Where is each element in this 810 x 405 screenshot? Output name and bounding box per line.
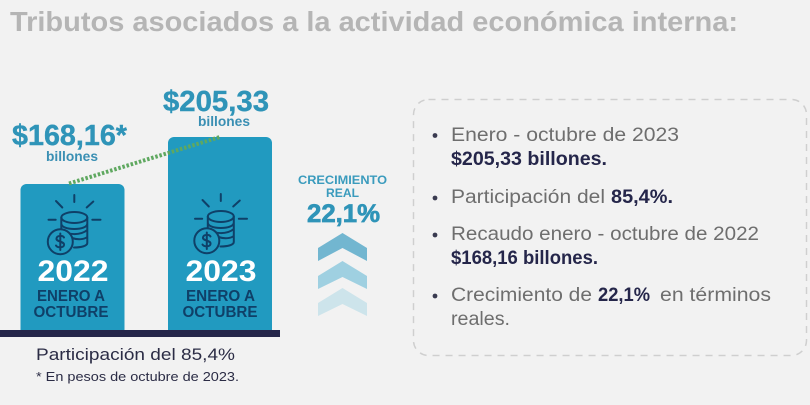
baseline [0,330,280,337]
real growth callout: 22,1% [307,200,380,228]
value: 2023: $205,33 [163,86,269,118]
chart note: participation: Participación del 85,4% [36,345,235,364]
bullet: crecimiento: en términos [660,285,771,306]
bar: 2023 [168,137,272,330]
bullet: recaudo 2022: Recaudo enero - octubre de 2022 [451,224,759,245]
bullet: enero octubre 2023: $205,33 billones. [451,149,607,170]
bullet: recaudo 2022: $168,16 billones. [451,248,598,269]
title: Tributos asociados a la actividad económica interna: [10,6,738,37]
bullet: participacion: Participación del [451,187,605,208]
bullet: crecimiento: reales. [451,309,510,330]
panel: summary [414,100,806,356]
bullet: crecimiento: 22,1% [598,285,650,306]
value: 2022: billones [46,149,98,164]
value: 2022: $168,16* [12,120,128,152]
bar: 2023: 2023 [186,255,256,288]
bullet: enero octubre 2023 [433,125,679,170]
real growth callout: REAL [326,186,359,200]
bullet: enero octubre 2023: Enero - octubre de 2023 [451,125,679,146]
bar: 2022 [20,184,124,330]
bullet: crecimiento: Crecimiento de [451,285,592,306]
real growth callout [298,173,387,316]
bullet: crecimiento [433,285,771,330]
bar: 2023: ENERO A [186,288,255,305]
bullet: participacion: 85,4%. [611,187,673,208]
bullet: participacion [433,187,673,208]
bar chart [0,86,280,337]
value: 2023: billones [198,114,250,129]
bar: 2023: OCTUBRE [182,304,258,321]
real growth callout: CRECIMIENTO [298,173,387,187]
bullet: recaudo 2022 [433,224,759,269]
growth line [69,137,220,184]
bar: 2022: 2022 [38,255,108,288]
icon: up chevrons [318,233,367,316]
footnote: * En pesos de octubre de 2023. [36,369,239,384]
bar: 2022: OCTUBRE [34,304,108,321]
bar: 2022: ENERO A [37,288,105,305]
